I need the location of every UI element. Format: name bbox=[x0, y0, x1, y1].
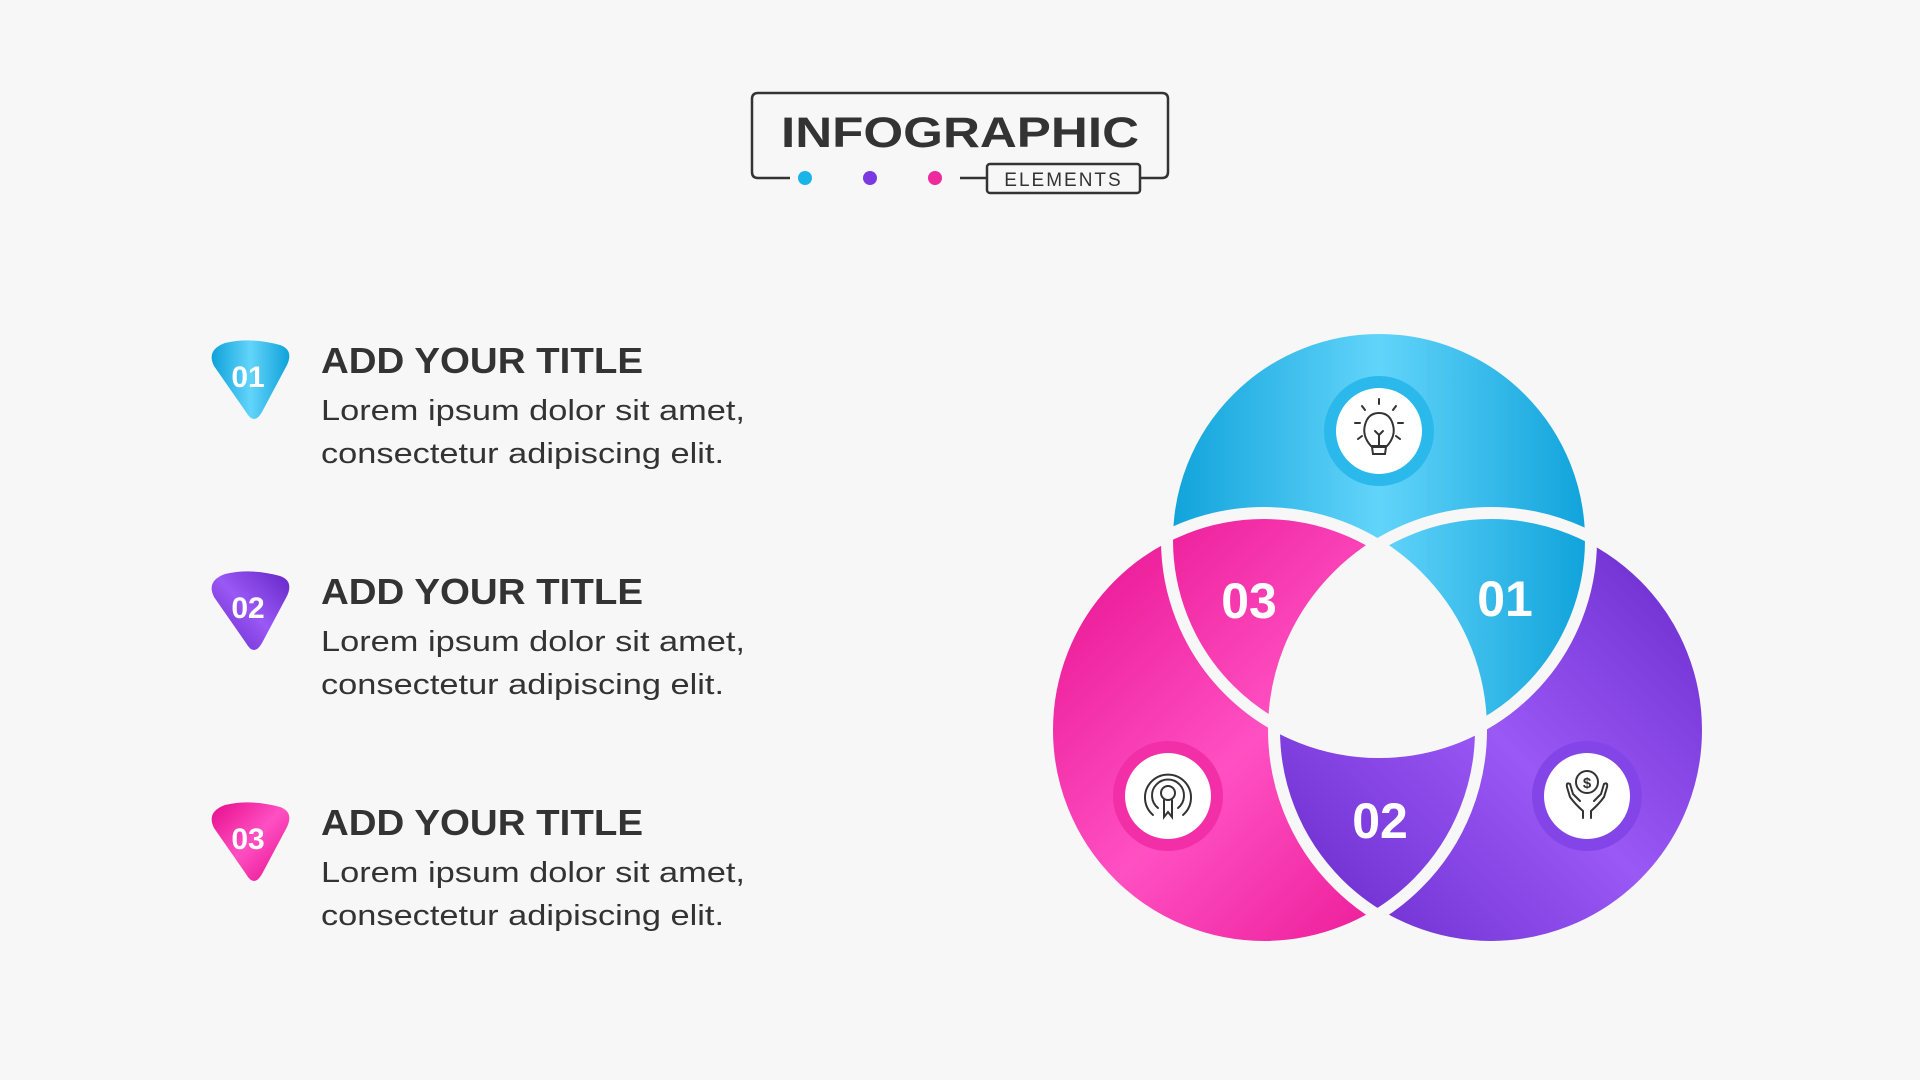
text 03: Lorem ipsum dolor sit amet, bbox=[321, 857, 745, 889]
title 03: ADD YOUR TITLE bbox=[321, 802, 643, 843]
text 02: Lorem ipsum dolor sit amet, bbox=[321, 626, 745, 658]
item 03 bbox=[212, 802, 745, 932]
venn diagram bbox=[1047, 328, 1708, 947]
icon: lightbulb bbox=[1324, 376, 1434, 486]
badge 02: 02 bbox=[231, 592, 265, 625]
icon: target bbox=[1113, 741, 1223, 851]
text 01: Lorem ipsum dolor sit amet, bbox=[321, 395, 745, 427]
text 02: consectetur adipiscing elit. bbox=[321, 669, 724, 701]
dots bbox=[790, 170, 950, 186]
subheading: ELEMENTS bbox=[987, 164, 1140, 193]
number 01: 01 bbox=[1477, 571, 1533, 627]
badge 03 bbox=[212, 802, 289, 881]
title block bbox=[752, 93, 1168, 193]
title 02: ADD YOUR TITLE bbox=[321, 571, 643, 612]
item 02 bbox=[212, 571, 745, 701]
icon: money hands: $ bbox=[1583, 775, 1592, 792]
item 01 bbox=[212, 340, 745, 470]
icon: money hands bbox=[1532, 741, 1642, 851]
text 03: consectetur adipiscing elit. bbox=[321, 900, 724, 932]
heading: INFOGRAPHIC: INFOGRAPHIC bbox=[781, 109, 1139, 157]
number 02: 02 bbox=[1352, 793, 1408, 849]
title 01: ADD YOUR TITLE bbox=[321, 340, 643, 381]
subheading: ELEMENTS: ELEMENTS bbox=[1004, 170, 1123, 191]
badge 03: 03 bbox=[231, 823, 265, 856]
badge 02 bbox=[212, 571, 289, 650]
text 01: consectetur adipiscing elit. bbox=[321, 438, 724, 470]
number 03: 03 bbox=[1221, 573, 1277, 629]
badge 01 bbox=[212, 340, 289, 419]
badge 01: 01 bbox=[231, 361, 265, 394]
